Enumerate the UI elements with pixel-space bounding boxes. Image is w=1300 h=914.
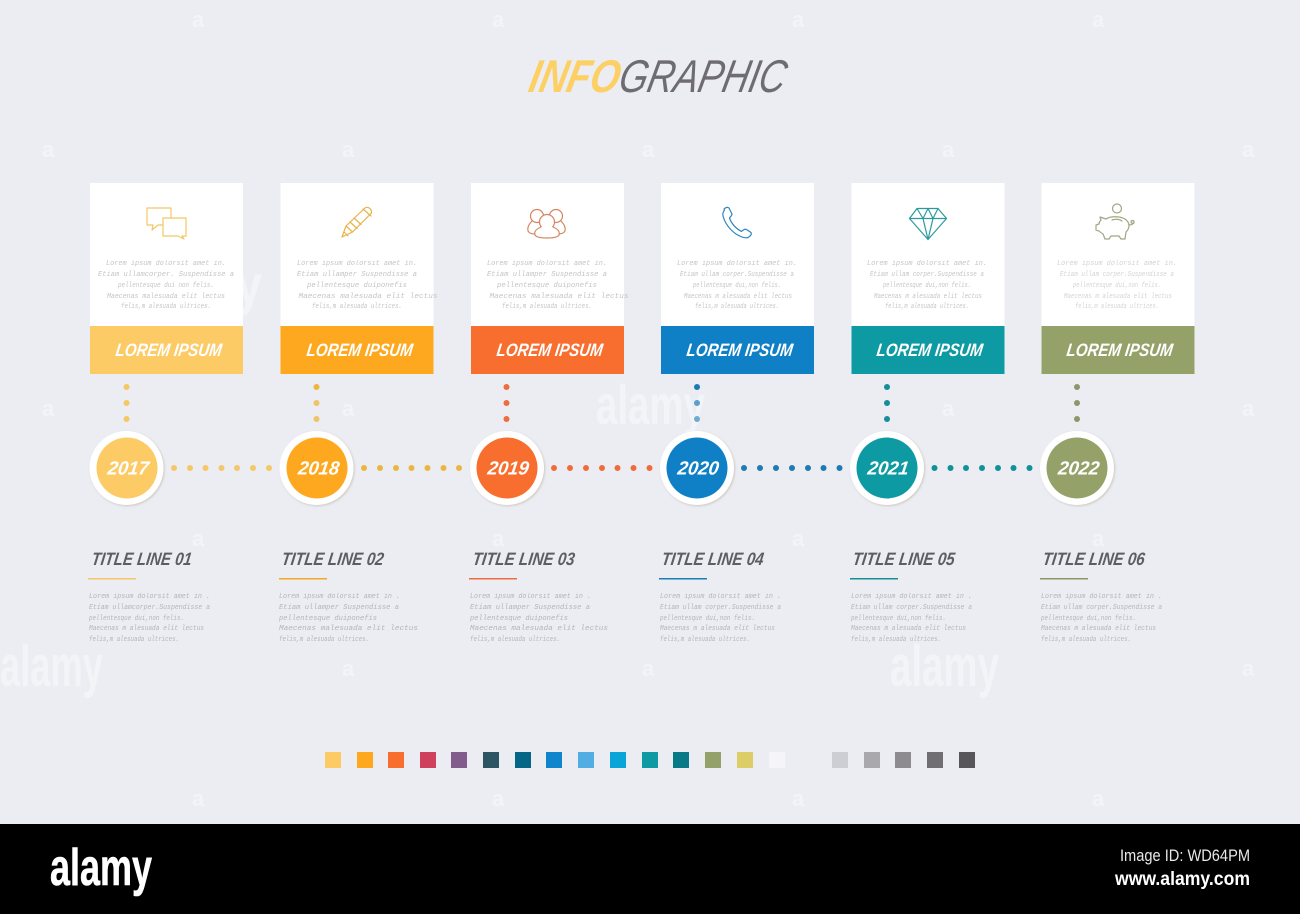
card text 4: felis,m alesuada ultrices.	[695, 303, 779, 311]
card text 5	[867, 260, 987, 311]
text block: title line 05: pellentesque dui,non felis.	[850, 615, 946, 623]
card text 3: felis,m alesuada ultrices.	[502, 303, 592, 311]
text block: title line 05: Lorem ipsum dolorsit amet in .	[851, 593, 972, 601]
timeline node 2018	[280, 431, 354, 505]
text block: title line 04: Etiam ullam corper.Suspendisse a	[660, 604, 781, 612]
text block: title line 03: felis,m alesuada ultrices.	[470, 636, 560, 644]
panel: card 4: LOREM IPSUM	[685, 340, 795, 360]
text block: title line 04: Lorem ipsum dolorsit amet in .	[660, 593, 781, 601]
footer logo: alamy	[50, 839, 152, 897]
title: INFO	[525, 50, 626, 102]
card text 1: Maecenas malesuada elit lectus	[107, 293, 225, 301]
watermark pattern: a	[792, 526, 805, 551]
text block: title line 02	[278, 549, 418, 644]
card text 2: Etiam ullamper Suspendisse a	[297, 271, 417, 279]
timeline node 2019	[470, 431, 544, 505]
text block: title line 06: Etiam ullam corper.Suspendisse a	[1041, 604, 1162, 612]
card text 4: pellentesque dui,non felis.	[692, 282, 781, 290]
website: www.alamy.com	[1114, 869, 1250, 890]
text block: title line 01: Etiam ullamcorper.Suspendisse a	[89, 604, 210, 612]
text block: title line 05: Maecenas m alesuada elit lectus	[851, 625, 966, 633]
timeline node 2018: 2018	[296, 459, 341, 479]
card text 3	[487, 260, 628, 311]
text block: title line 01: Maecenas m alesuada elit lectus	[89, 625, 204, 633]
watermark pattern: a	[342, 396, 355, 421]
watermark pattern: a	[192, 786, 205, 811]
watermark pattern: a	[792, 786, 805, 811]
text block: title line 06: TITLE LINE 06	[1041, 549, 1147, 569]
watermark pattern: a	[1242, 656, 1255, 681]
watermark pattern: a	[42, 396, 55, 421]
timeline node 2017: 2017	[105, 459, 152, 479]
timeline node 2020: 2020	[675, 459, 721, 479]
panel: card 1	[90, 183, 243, 374]
panel: card 6: LOREM IPSUM	[1065, 340, 1175, 360]
text block: title line 05	[850, 549, 972, 644]
text block: title line 02: Lorem ipsum dolorsit amet in .	[279, 593, 400, 601]
text block: title line 06	[1040, 549, 1162, 644]
panel: card 1: LOREM IPSUM	[114, 340, 224, 360]
watermark pattern: a	[192, 526, 205, 551]
panel: card 2: LOREM IPSUM	[305, 340, 415, 360]
text block: title line 01	[88, 549, 210, 644]
watermark pattern: a	[342, 137, 355, 162]
title	[525, 50, 792, 102]
card text 3: pellentesque duiponefis	[496, 282, 597, 290]
text block: title line 03: pellentesque duiponefis	[469, 615, 568, 623]
watermark pattern: a	[192, 7, 205, 32]
text block: title line 01: pellentesque dui,non felis.	[88, 615, 184, 623]
card text 4: Etiam ullam corper.Suspendisse a	[680, 271, 794, 279]
panel: card 5: LOREM IPSUM	[875, 340, 985, 360]
card text 5: pellentesque dui,non felis.	[882, 282, 971, 290]
text block: title line 06: Lorem ipsum dolorsit amet in .	[1041, 593, 1162, 601]
text block: title line 01: Lorem ipsum dolorsit amet in .	[89, 593, 210, 601]
timeline node 2022	[1040, 431, 1114, 505]
icon: diamond	[910, 208, 946, 240]
watermark pattern: a	[1092, 7, 1105, 32]
card text 6: pellentesque dui,non felis.	[1072, 282, 1161, 290]
text block: title line 03: Etiam ullamper Suspendisse a	[470, 604, 590, 612]
text block: title line 06: Maecenas m alesuada elit lectus	[1041, 625, 1156, 633]
text block: title line 03: Lorem ipsum dolorsit amet in .	[470, 593, 591, 601]
icon: people group	[528, 210, 565, 238]
panel: card 2	[280, 183, 438, 374]
text block: title line 04: TITLE LINE 04	[660, 549, 765, 569]
watermark pattern: alamy	[596, 373, 705, 436]
watermark pattern: y	[236, 253, 262, 316]
card text 4: Lorem ipsum dolorsit amet in.	[677, 260, 797, 268]
text block: title line 05: TITLE LINE 05	[851, 549, 957, 569]
watermark pattern: a	[1092, 786, 1105, 811]
watermark pattern: a	[42, 137, 55, 162]
text block: title line 04: Maecenas m alesuada elit lectus	[660, 625, 775, 633]
watermark pattern: a	[792, 7, 805, 32]
text block: title line 03: Maecenas malesuada elit lectus	[470, 625, 608, 633]
card text 3: Etiam ullamper Suspendisse a	[487, 271, 607, 279]
panel: card 3: LOREM IPSUM	[495, 340, 605, 360]
card text 1: pellentesque dui non felis.	[117, 282, 214, 290]
card text 4: Maecenas m alesuada elit lectus	[684, 293, 792, 301]
watermark pattern: a	[642, 137, 655, 162]
timeline node 2019: 2019	[485, 459, 531, 479]
timeline node 2021: 2021	[865, 459, 910, 479]
panel: card 6	[1042, 183, 1194, 374]
card text 4	[677, 260, 797, 311]
watermark pattern: a	[1092, 526, 1105, 551]
text block: title line 02: felis,m alesuada ultrices.	[279, 636, 369, 644]
text block: title line 01: felis,m alesuada ultrices.	[89, 636, 179, 644]
icon: pencil	[342, 207, 372, 237]
icon: piggy bank	[1096, 204, 1134, 239]
title: GRAPHIC	[615, 50, 792, 102]
card text 5: Etiam ullam corper.Suspendisse a	[870, 271, 984, 279]
card text 5: felis,m alesuada ultrices.	[885, 303, 969, 311]
watermark pattern: alamy	[890, 634, 999, 699]
footer bar	[0, 824, 1300, 914]
text block: title line 01: TITLE LINE 01	[90, 549, 193, 569]
card text 1: Lorem ipsum dolorsit amet in.	[106, 260, 226, 268]
watermark pattern: a	[342, 656, 355, 681]
text block: title line 05: felis,m alesuada ultrices.	[851, 636, 941, 644]
watermark pattern: a	[492, 7, 505, 32]
timeline node 2020	[660, 431, 734, 505]
timeline node 2017	[90, 431, 164, 505]
timeline node 2021	[850, 431, 924, 505]
text block: title line 04: pellentesque dui,non felis.	[659, 615, 755, 623]
card text 5: Maecenas m alesuada elit lectus	[874, 293, 982, 301]
colour palette	[325, 752, 975, 768]
card text 1: felis,m alesuada ultrices.	[121, 303, 211, 311]
card text 6	[1057, 260, 1177, 311]
card text 6: Etiam ullam corper.Suspendisse a	[1060, 271, 1174, 279]
watermark pattern: a	[642, 656, 655, 681]
text block: title line 02: Etiam ullamper Suspendisse a	[279, 604, 399, 612]
watermark pattern: a	[492, 786, 505, 811]
card text 6: Lorem ipsum dolorsit amet in.	[1057, 260, 1177, 268]
card text 2: Maecenas malesuada elit lectus	[298, 293, 438, 301]
watermark pattern: a	[942, 137, 955, 162]
card text 6: Maecenas m alesuada elit lectus	[1064, 293, 1172, 301]
connector dots	[124, 384, 1080, 471]
card text 1	[98, 260, 234, 311]
card text 2: felis,m alesuada ultrices.	[312, 303, 402, 311]
text block: title line 04	[659, 549, 781, 644]
icon: speech bubbles	[147, 208, 186, 239]
card text 5: Lorem ipsum dolorsit amet in.	[867, 260, 987, 268]
panel: card 5	[852, 183, 1004, 374]
card text 2: pellentesque duiponefis	[306, 282, 407, 290]
card text 2	[297, 260, 438, 311]
watermark pattern: a	[1242, 137, 1255, 162]
text block: title line 06: pellentesque dui,non felis.	[1040, 615, 1136, 623]
icon: telephone	[723, 207, 751, 238]
text block: title line 06: felis,m alesuada ultrices.	[1041, 636, 1131, 644]
text block: title line 03	[469, 549, 608, 644]
watermark pattern: a	[1242, 396, 1255, 421]
text block: title line 03: TITLE LINE 03	[471, 549, 576, 569]
watermark pattern: a	[492, 526, 505, 551]
text block: title line 02: pellentesque duiponefis	[278, 615, 377, 623]
card text 1: Etiam ullamcorper. Suspendisse a	[98, 271, 234, 279]
card text 3: Lorem ipsum dolorsit amet in.	[487, 260, 607, 268]
text block: title line 02: Maecenas malesuada elit lectus	[279, 625, 418, 633]
card text 6: felis,m alesuada ultrices.	[1075, 303, 1159, 311]
image id: Image ID: WD64PM	[1120, 846, 1250, 865]
watermark pattern: a	[942, 396, 955, 421]
panel: card 3	[471, 183, 628, 374]
timeline node 2022: 2022	[1056, 459, 1101, 479]
panel: card 4	[661, 183, 814, 374]
text block: title line 04: felis,m alesuada ultrices.	[660, 636, 750, 644]
card text 3: Maecenas malesuada elit lectus	[490, 293, 628, 301]
text block: title line 05: Etiam ullam corper.Suspendisse a	[851, 604, 972, 612]
watermark pattern: alamy	[0, 634, 103, 699]
text block: title line 02: TITLE LINE 02	[280, 549, 385, 569]
card text 2: Lorem ipsum dolorsit amet in.	[297, 260, 417, 268]
